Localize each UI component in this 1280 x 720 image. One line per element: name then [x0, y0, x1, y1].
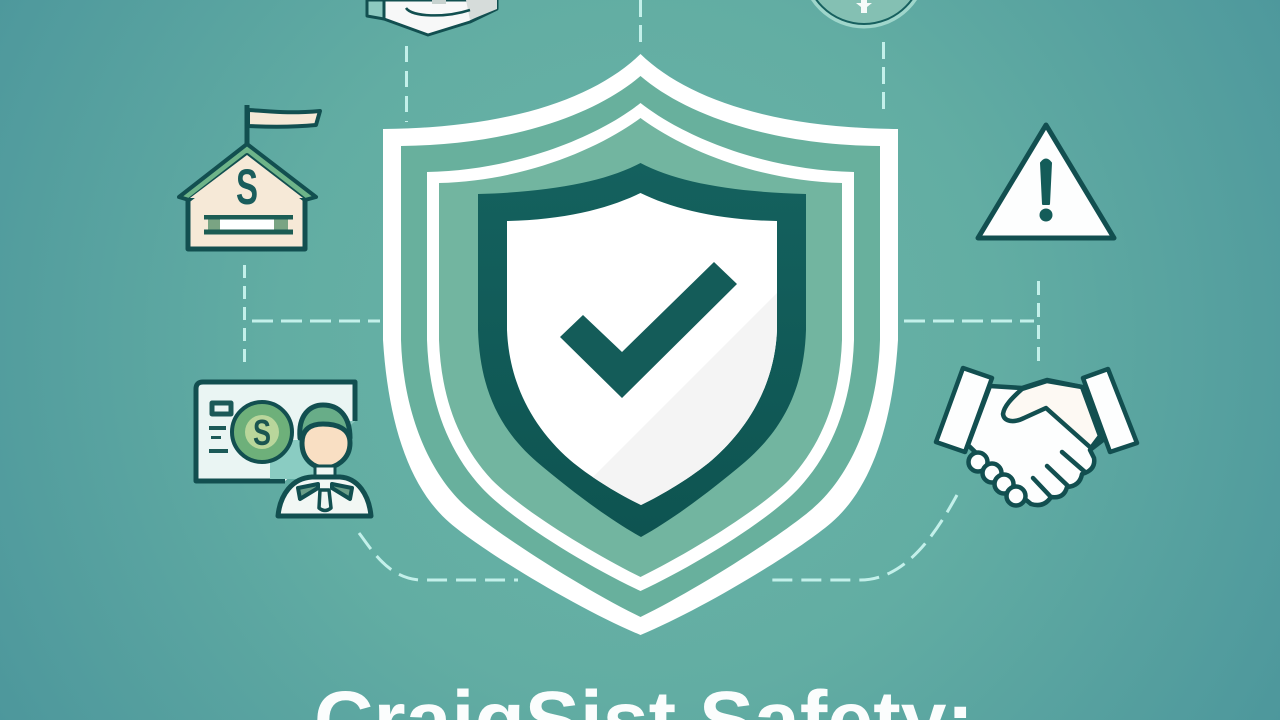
flag — [248, 110, 320, 127]
shield inner green band — [439, 118, 842, 577]
person torso — [278, 477, 371, 516]
left cuff — [936, 368, 992, 452]
dashed connectors — [244, 0, 1038, 580]
roof — [179, 144, 316, 200]
person face — [302, 424, 350, 468]
right cuff — [1083, 369, 1137, 452]
icon: package at top — [367, 0, 497, 35]
finger separators — [1033, 452, 1085, 496]
sign plate — [204, 215, 293, 234]
check mark — [560, 262, 737, 398]
fingers left — [968, 452, 988, 472]
hands — [968, 380, 1103, 505]
icon: id card with coin and person — [196, 382, 371, 516]
icon: warning triangle — [978, 125, 1114, 238]
dollar sign: S — [236, 159, 258, 215]
icon: bank house with flag — [179, 105, 320, 249]
icon: id card with coin and person: S — [253, 412, 271, 453]
shield dark border — [478, 163, 806, 537]
card text lines — [209, 403, 231, 453]
shield white face — [507, 193, 777, 505]
shield outer white band — [383, 54, 898, 635]
scarf tail — [319, 490, 331, 510]
coin — [232, 402, 292, 462]
thumb — [1003, 381, 1100, 448]
shield outer green band — [401, 76, 880, 617]
shield — [383, 54, 898, 635]
card — [196, 382, 355, 481]
shield second white band — [427, 103, 854, 591]
house body — [188, 192, 305, 249]
person hair — [300, 405, 350, 438]
exclamation mark — [1041, 160, 1051, 204]
scarf — [298, 484, 352, 499]
icon: circle badge at top — [803, 0, 925, 26]
icon: handshake — [936, 368, 1137, 506]
person neck — [315, 466, 335, 480]
